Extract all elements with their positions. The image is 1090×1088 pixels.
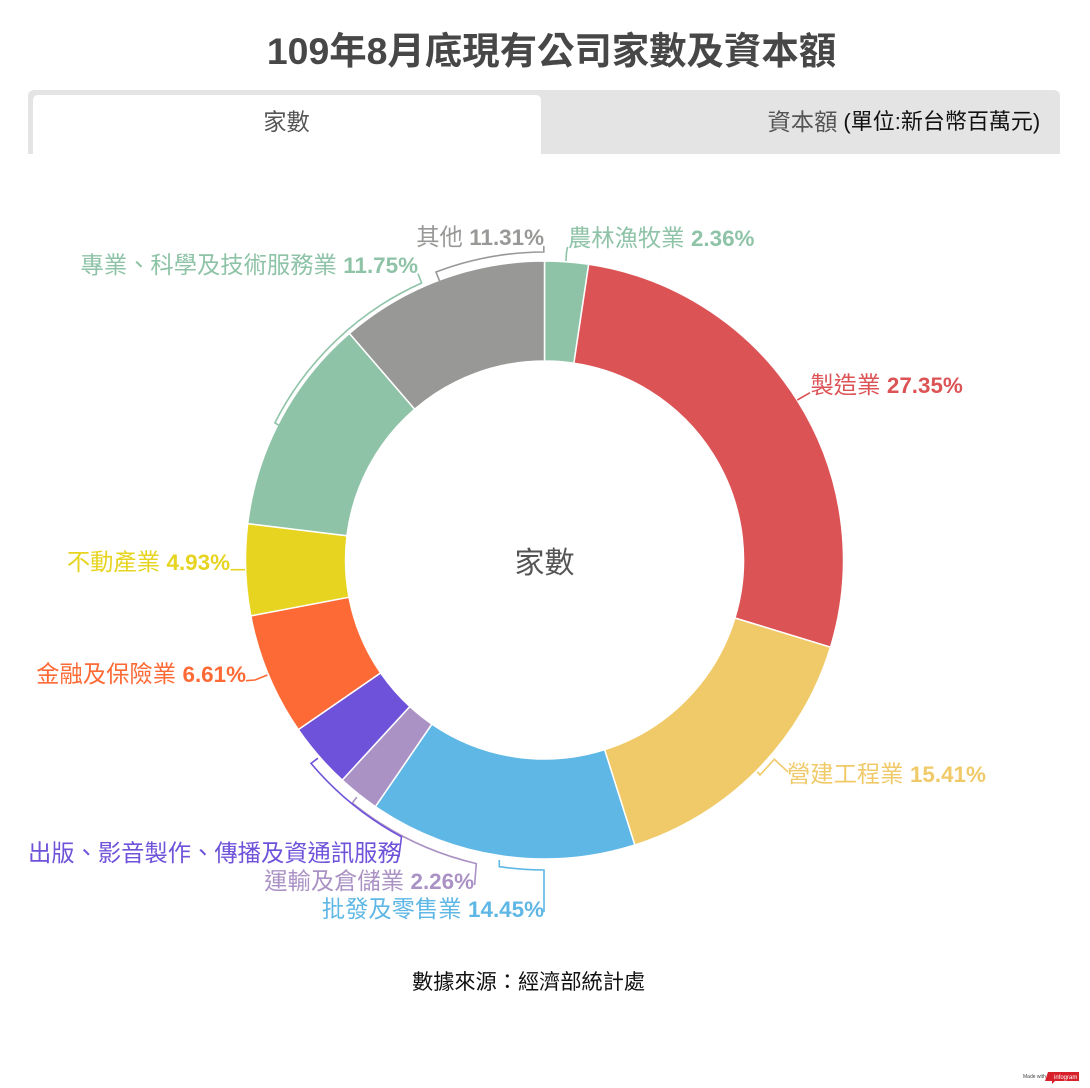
label: 專業、科學及技術服務業: 專業、科學及技術服務業 11.75% [81, 252, 418, 278]
segment: 製造業 [574, 264, 843, 647]
inactive tab: 資本額: 資本額 [768, 109, 837, 135]
label: 農林漁牧業: 農林漁牧業 2.36% [568, 225, 755, 251]
credit: made with infogram [1023, 1072, 1079, 1084]
tab bar [28, 90, 1060, 154]
segment: 金融及保險業 [251, 597, 381, 730]
title: 109年8月底現有公司家數及資本額 [267, 30, 836, 72]
label: 製造業: 製造業 27.35% [810, 372, 963, 398]
label: 批發及零售業 [322, 860, 544, 922]
segment: 出版、影音製作、傳播及資通訊服務 [298, 673, 410, 780]
label: 專業、科學及技術服務業 [81, 252, 422, 426]
inactive tab: 資本額: (單位:新台幣百萬元) [843, 109, 1040, 134]
active tab: 家數: 家數 [263, 109, 310, 135]
segment: 營建工程業 [605, 618, 830, 845]
label: 其他: 其他 11.31% [416, 224, 544, 250]
segment: 不動產業 [245, 524, 349, 616]
label: 金融及保險業: 金融及保險業 6.61% [36, 661, 246, 687]
label: 出版、影音製作、傳播及資通訊服務 [28, 758, 402, 866]
source note: 數據來源：經濟部統計處 [412, 970, 645, 994]
segment: 農林漁牧業 [544, 261, 589, 363]
label: 出版、影音製作、傳播及資通訊服務: 出版、影音製作、傳播及資通訊服務 [28, 840, 401, 866]
active tab: 家數 [33, 95, 541, 154]
segment: 批發及零售業 [375, 724, 635, 859]
label: 營建工程業: 營建工程業 15.41% [787, 761, 986, 787]
donut chart [245, 261, 843, 859]
label: 運輸及倉儲業 [264, 797, 476, 894]
segment: 專業、科學及技術服務業 [248, 333, 415, 536]
label: 其他 [416, 224, 544, 282]
label: 運輸及倉儲業: 運輸及倉儲業 2.26% [264, 868, 474, 894]
label: 不動產業: 不動產業 4.93% [67, 549, 230, 575]
donut center label: 家數 [514, 547, 574, 580]
segment: 運輸及倉儲業 [342, 706, 432, 807]
credit: made with infogram: infogram [1054, 1075, 1077, 1081]
credit: made with infogram: Made with [1023, 1074, 1046, 1080]
label: 批發及零售業: 批發及零售業 14.45% [322, 896, 544, 922]
tab bar background [28, 90, 1060, 154]
segment: 其他 [349, 261, 544, 409]
